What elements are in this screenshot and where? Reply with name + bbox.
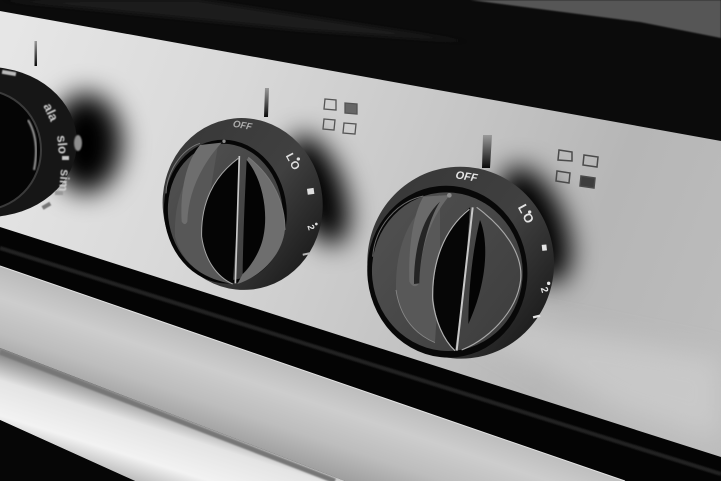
left knob — [0, 67, 82, 217]
black divider stripe — [0, 227, 721, 481]
middle knob labels — [232, 119, 318, 256]
middle knob face — [157, 134, 294, 290]
left indicator mark — [34, 41, 37, 66]
left knob tab — [74, 135, 82, 151]
right indicator mark — [482, 135, 492, 168]
right knob labels — [455, 169, 550, 319]
black cooktop edge — [0, 0, 721, 145]
middle status squares — [323, 99, 357, 134]
right knob — [358, 157, 564, 368]
middle knob ring — [154, 110, 331, 298]
left knob dial labels: slo — [54, 135, 71, 155]
right knob ring — [358, 157, 564, 368]
middle knob labels: OFF — [232, 119, 254, 133]
door handle rail — [0, 348, 345, 481]
middle knob labels: LO — [283, 151, 302, 174]
right status squares — [556, 150, 598, 188]
right knob labels: LO — [515, 202, 537, 228]
right knob grip — [373, 193, 521, 351]
middle knob grip — [166, 140, 285, 284]
left knob dial labels — [2, 70, 73, 210]
right knob face — [359, 178, 536, 366]
left knob dial labels: ala — [40, 101, 62, 124]
right knob labels: 2 — [538, 286, 550, 295]
lower door steel — [0, 266, 625, 481]
right knob labels: OFF — [455, 169, 479, 185]
middle indicator mark — [264, 88, 269, 117]
left knob dial labels: sim — [56, 169, 73, 192]
knob shadows — [50, 93, 586, 294]
middle knob labels: 2 — [305, 223, 316, 231]
middle knob — [154, 110, 331, 298]
